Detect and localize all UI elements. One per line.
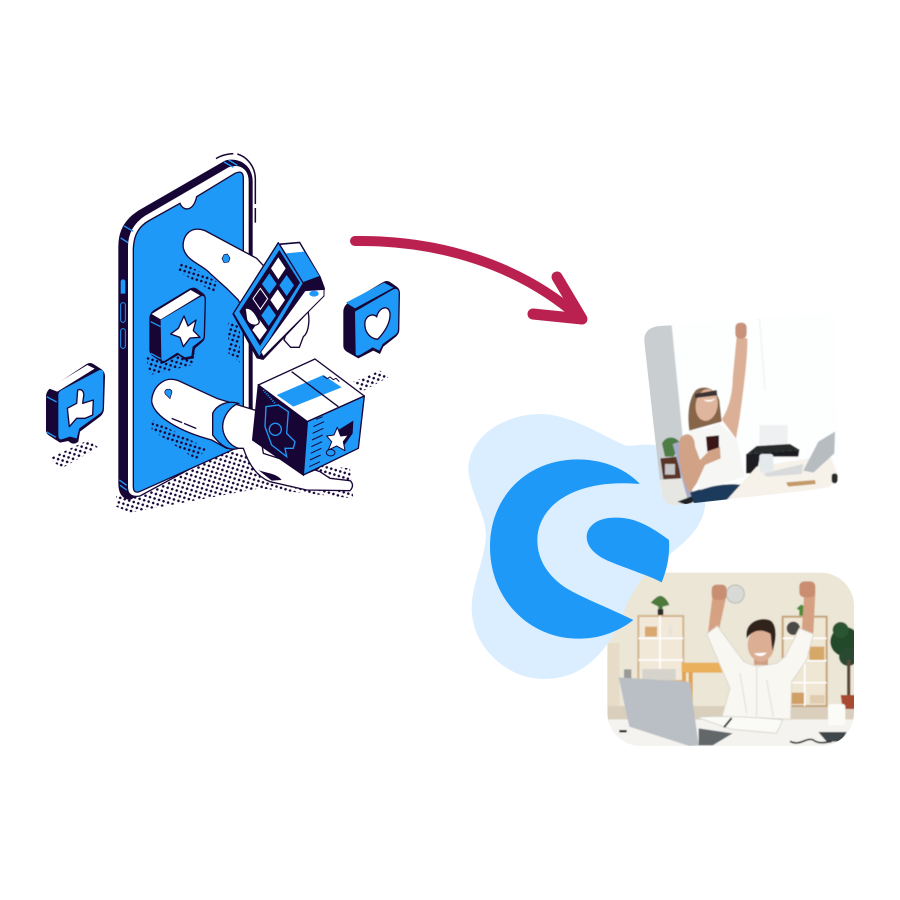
arms [708, 597, 726, 633]
blue logo mark [490, 459, 669, 639]
hand holding box [152, 379, 352, 491]
shadow dots right bubble [353, 371, 388, 392]
red curved arrow [355, 241, 582, 319]
light blue blob [468, 414, 705, 679]
thumb icon [67, 390, 93, 427]
photo: woman celebrating with phone [644, 319, 838, 505]
phone body [118, 160, 253, 500]
dots on screen [178, 260, 217, 293]
heart bubble [343, 281, 400, 358]
laptop [619, 677, 699, 746]
heart icon [365, 308, 390, 339]
motion lines around phone [216, 154, 255, 223]
hand holding card [183, 229, 309, 347]
woman head [688, 388, 722, 431]
woman arms [679, 434, 721, 493]
wristband [213, 402, 238, 449]
shadow dots left bubble [49, 440, 98, 468]
thumb bubble [46, 363, 105, 444]
parcel box [253, 359, 364, 475]
shadow dots under phone [116, 448, 353, 513]
star bubble [149, 288, 206, 363]
star icon [171, 316, 200, 347]
photo: man celebrating at laptop [607, 572, 854, 746]
payment card terminal [232, 242, 325, 360]
illustration: phone with shopping hands [46, 154, 400, 513]
shirt [707, 626, 813, 719]
head [754, 659, 768, 666]
phone screen [133, 172, 243, 492]
phone buttons [121, 279, 125, 294]
top [689, 423, 745, 490]
